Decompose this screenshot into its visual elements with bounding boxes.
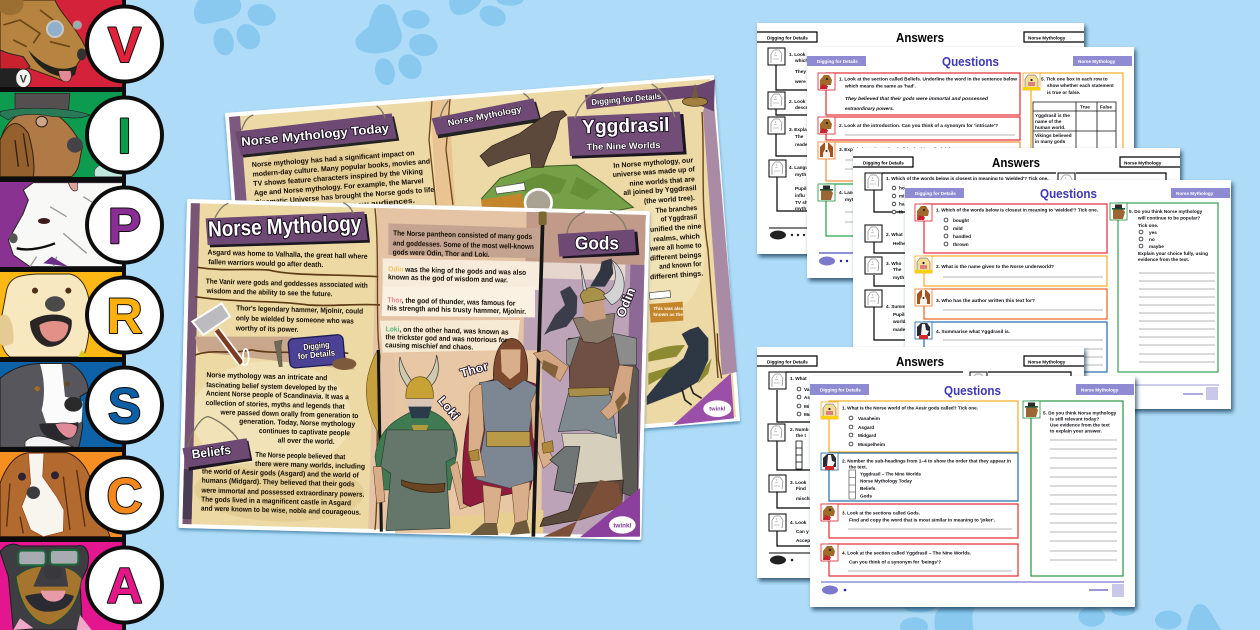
text block: left column: fallen warriors would go after death. xyxy=(208,257,323,269)
poster: front, Norse Mythology and Gods xyxy=(178,199,650,540)
question 2 box: the text. xyxy=(849,464,867,470)
heading: Norse Mythology Today: Norse Mythology Today xyxy=(241,121,390,149)
question 1 box: 1. Which of the words below is closest in meaning to 'wielded'? Tick one. xyxy=(936,208,1098,212)
answer boxes: 1. Look xyxy=(789,52,806,57)
circle P xyxy=(87,188,162,262)
text block: Yggdrasil: and known for xyxy=(659,260,702,271)
circle A xyxy=(87,548,162,622)
answer boxes: myth xyxy=(795,172,806,177)
text block: Yggdrasil: were all home to xyxy=(649,241,702,253)
heading: Norse Mythology Today xyxy=(235,106,399,158)
question 3 box: Find and copy the word that is most similar in meaning to 'joker'. xyxy=(849,518,995,522)
text block: left column: fascinating belief system developed by the xyxy=(206,380,337,392)
question 3 box: 3. Explain how the author builds the idea of Mjolnir. xyxy=(839,147,953,152)
text block: left column: The Norse people believed that xyxy=(255,450,346,461)
question 1 box xyxy=(821,401,1018,452)
icon: raven on spear xyxy=(544,286,577,335)
answer boxes: mi xyxy=(899,194,904,198)
question 1 box: They believed that their gods were immortal and possessed xyxy=(845,96,988,101)
question 5 box: Tick one. xyxy=(1138,223,1158,228)
heading: Norse Mythology: Norse Mythology xyxy=(208,210,362,242)
answer boxes xyxy=(865,173,1166,340)
band: blue S xyxy=(0,362,122,447)
heading: Yggdrasil The Nine Worlds: The Nine Worlds xyxy=(586,140,661,152)
question 5 box: is still relevant today? xyxy=(1050,416,1099,422)
question 4 box xyxy=(818,184,1020,236)
text block: left column: collection of stories, myths and legends that xyxy=(206,398,345,411)
answer boxes: Mi xyxy=(804,404,809,409)
answer boxes: Pupils xyxy=(795,186,809,191)
header: Digging for Details xyxy=(767,360,808,364)
answer boxes: the t xyxy=(796,433,806,438)
question 2 box: Norse Mythology Today xyxy=(860,478,912,484)
header: Digging for Details xyxy=(915,191,956,196)
black dividers xyxy=(0,0,126,630)
answer boxes: describ xyxy=(795,105,812,110)
header: Questions xyxy=(942,55,999,69)
text block: gods paragraphs: the trickster god and was notorious for xyxy=(385,332,508,344)
header: Answers xyxy=(992,156,1040,170)
answer boxes: ha xyxy=(899,202,905,206)
answer boxes: readers xyxy=(795,142,812,147)
icon: eagle xyxy=(480,111,567,167)
header: Digging for Details xyxy=(863,160,904,166)
question 5 box: 5. Do you think Norse mythology xyxy=(1043,410,1117,416)
text block: gods paragraphs: The Norse pantheon consisted of many gods xyxy=(393,228,532,241)
text block: Yggdrasil xyxy=(612,156,703,281)
header: Digging for Details xyxy=(820,388,861,392)
text block: Norse Mythology Today xyxy=(252,147,435,216)
question 4 box xyxy=(821,544,1018,576)
question 4 box: 4. Language xyxy=(839,190,867,195)
band: purple P xyxy=(0,182,123,267)
text block: Norse Mythology Today: TV shows feature characters inspired by the Viking xyxy=(253,167,423,188)
question 4 box: 4. Summarise what Yggdrasil is. xyxy=(936,329,1010,334)
answer boxes: 2. Look xyxy=(789,99,806,104)
question 2 box xyxy=(818,117,1020,140)
banner: Norse Mythology xyxy=(432,93,542,138)
text block: left column: Ancient Norse people of Scandinavia. It was a xyxy=(206,389,350,401)
question 1 box: Muspelheim xyxy=(858,442,885,447)
text block: left column: worthy of its power. xyxy=(235,323,299,334)
circle S xyxy=(87,368,162,442)
worksheet: answers 1 xyxy=(757,23,1084,254)
answer boxes: 1. What xyxy=(790,376,807,381)
heading: Yggdrasil The Nine Worlds xyxy=(567,84,687,159)
question 5 box: 5. Do you think Norse mythology xyxy=(1129,209,1203,214)
text block: Yggdrasil: nine worlds that are xyxy=(629,175,695,188)
heading: Gods: Gods xyxy=(575,232,619,253)
answer boxes: The xyxy=(795,134,804,139)
text block: left column: Norse mythology was an intricate and xyxy=(206,370,327,382)
text block: left column: The gods lived in a magnificent castle in Asgard xyxy=(201,494,351,507)
answer boxes: ho xyxy=(899,186,905,190)
question 1 box: bought xyxy=(953,218,969,223)
top banner: Digging for Details xyxy=(585,79,715,112)
small map labels xyxy=(481,183,553,217)
question 5 box with table: False xyxy=(1100,104,1112,110)
text block: gods paragraphs: his strength and his trusty hammer, Mjolnir. xyxy=(387,303,526,316)
answer boxes: myth xyxy=(795,206,806,211)
header: Norse Mythology xyxy=(1078,59,1116,64)
answer boxes: 3. Look xyxy=(790,480,807,485)
text block: left column xyxy=(200,248,371,517)
heading: Gods xyxy=(558,212,639,258)
icon: raven on helmet xyxy=(590,258,613,287)
text block: left column: and were known to be wise, noble and courageous. xyxy=(201,503,361,517)
band: orange C xyxy=(0,452,122,537)
header: Norse Mythology xyxy=(1028,36,1066,40)
text block: left column: generation. Today, Norse mythology xyxy=(239,416,355,428)
panel: gods illustration: Odin xyxy=(614,286,638,319)
question 1 box: extraordinary powers. xyxy=(845,106,894,111)
header: Norse Mythology xyxy=(1176,191,1214,196)
question 1 box: Vanaheim xyxy=(858,416,880,421)
question 5 box with table: human world. xyxy=(1035,125,1065,130)
question 2 box: 2. What is the name given to the Norse underworld? xyxy=(936,264,1054,269)
question 1 box: 1. What is the Norse world of the Aesir gods called? Tick one. xyxy=(842,406,978,410)
footer xyxy=(769,228,817,240)
tag: This was also xyxy=(653,306,684,311)
header: Norse Mythology xyxy=(1081,388,1119,392)
circle R xyxy=(87,278,162,352)
axe head xyxy=(550,447,580,493)
question 5 box: Use evidence from the text xyxy=(1050,422,1110,428)
question 1 box: Midgard xyxy=(858,433,876,438)
panel: lower right raven and twinkl corner xyxy=(647,291,734,425)
header: Answers xyxy=(896,355,944,369)
text block: Yggdrasil: In Norse mythology, our xyxy=(613,156,694,170)
header xyxy=(853,156,1180,170)
band: pink A xyxy=(0,542,122,630)
footer xyxy=(917,385,1219,400)
header xyxy=(807,55,1132,69)
text block: Norse Mythology Today: Norse mythology has had a significant impact on xyxy=(252,148,415,169)
worksheet: questions 1 xyxy=(807,47,1134,278)
answer boxes: Pupils xyxy=(893,312,907,317)
answer boxes: TV sh xyxy=(795,200,808,205)
figure: Loki xyxy=(373,355,467,531)
worksheet: answers 3 xyxy=(757,347,1084,578)
footer xyxy=(821,582,1124,597)
icon: cavalier spaniel dog xyxy=(0,453,110,537)
text block: Norse Mythology Today: and introduced them to new audiences. xyxy=(255,196,415,216)
question 5 box: Explain your choice fully, using xyxy=(1138,251,1208,256)
question 4 box: myth xyxy=(845,197,856,202)
text block: left column: there were many worlds, including xyxy=(255,459,365,471)
question 5 box: evidence from the text. xyxy=(1138,257,1189,262)
circle V: V xyxy=(108,17,142,73)
twinkl corner xyxy=(580,488,640,537)
question 2 box: Yggdrasil – The Nine Worlds xyxy=(860,472,921,476)
answer boxes: were xyxy=(794,79,806,84)
text block: Yggdrasil: (the world tree). xyxy=(644,194,695,206)
question 5 box: to explain your answer. xyxy=(1050,428,1102,434)
panel: left parchment details xyxy=(182,203,380,530)
text block: left column: were passed down orally from generation to xyxy=(219,407,359,420)
answer boxes xyxy=(768,372,1071,546)
answer boxes: 4. Summ xyxy=(886,304,906,309)
icon: Mjolnir hammer xyxy=(192,303,249,365)
text block: gods paragraphs: Loki, on the other hand, was known as xyxy=(386,324,509,336)
icon: bloodhound dog in hat xyxy=(0,93,123,177)
icon: terrier dog with round glasses: V xyxy=(20,74,28,86)
question 1 box xyxy=(818,73,1020,115)
heading: Norse Mythology xyxy=(206,203,370,247)
answer boxes: Helheim xyxy=(893,241,911,246)
text block: left column: continues to captivate people xyxy=(259,426,350,437)
circle C xyxy=(87,458,162,532)
question 5 box with table: show whether each statement xyxy=(1047,83,1114,88)
question 5 box with table: True xyxy=(1080,104,1090,110)
text block: Yggdrasil: all joined by Yggdrasil xyxy=(623,184,697,197)
labels: Loki xyxy=(435,394,462,422)
question 5 box with table: 5. Tick one box in each row to xyxy=(1041,76,1108,82)
answer boxes: Find xyxy=(796,486,806,491)
header xyxy=(810,384,1134,398)
tree canopy xyxy=(482,165,633,217)
question 5 box: maybe xyxy=(1149,244,1164,249)
answer boxes: mischie xyxy=(796,496,814,501)
text block: left column: were immortal and possessed extraordinary powers. xyxy=(200,485,364,499)
question 5 box with table: Vikings believed xyxy=(1035,133,1072,138)
header: Answers xyxy=(896,31,944,45)
text block: gods paragraphs xyxy=(385,228,534,353)
circle S: S xyxy=(108,378,141,434)
answer boxes: Va xyxy=(804,387,810,392)
text block: Yggdrasil: different beings xyxy=(650,251,702,263)
answer boxes: 4. Language xyxy=(789,165,817,170)
question 2 box: Beliefs xyxy=(860,486,876,491)
icon: gold axe xyxy=(366,350,381,532)
circle V xyxy=(87,6,162,82)
question 5 box: yes xyxy=(1149,230,1157,235)
answer boxes: As xyxy=(804,395,810,400)
answer boxes: 4. Look xyxy=(790,520,807,525)
tag: known as the xyxy=(653,312,683,317)
heading: Yggdrasil The Nine Worlds: Yggdrasil xyxy=(582,115,670,138)
text block: left column: The Vanir were gods and goddesses associated with xyxy=(206,277,368,290)
text block: gods paragraphs: and goddesses. Some of the most well-known xyxy=(393,238,534,251)
header: Questions xyxy=(944,384,1001,398)
answer boxes: 3. Explain xyxy=(789,127,811,132)
worksheet: questions 2 xyxy=(905,180,1231,409)
question 3 box: 3. Look at the sections called Gods. xyxy=(842,510,920,516)
answer boxes: myth xyxy=(893,275,904,280)
answer boxes: influ xyxy=(795,193,805,198)
text block: Norse Mythology Today: Age and Norse mythology. For example, the Marvel xyxy=(254,176,424,198)
answer boxes: They xyxy=(795,69,806,74)
circle R: R xyxy=(106,288,143,344)
text block: Norse Mythology Today: Cinematic Universe has brought the Norse gods to life xyxy=(254,185,434,207)
answer boxes xyxy=(768,48,817,211)
worksheet: questions 3 xyxy=(810,376,1135,607)
header: Questions xyxy=(1040,187,1097,201)
answer boxes: 2. What xyxy=(886,232,903,237)
band: red V xyxy=(0,0,122,88)
question 2 box: 2. Number the sub-headings from 1–4 to show the order that they appear in xyxy=(842,458,1011,464)
badge: Digging for Details: Digging xyxy=(303,339,330,352)
badge: Digging for Details xyxy=(288,334,356,370)
text block: Yggdrasil: of Yggdrasil xyxy=(660,213,697,224)
text block: left column: Thor's legendary hammer, Mjolnir, could xyxy=(236,303,363,316)
text block: gods paragraphs: Thor, the god of thunder, was famous for xyxy=(387,295,516,308)
text block: Norse Mythology Today: modern-day culture. Many popular books, movies and xyxy=(252,157,430,179)
question 1 box: Asgard xyxy=(858,425,874,430)
band: green I xyxy=(0,92,123,177)
text block: gods paragraphs: causing mischief and chaos. xyxy=(385,340,473,352)
header: Digging for Details xyxy=(817,59,858,64)
question 5 box: will continue to be popular? xyxy=(1137,216,1200,220)
olive branches xyxy=(648,345,712,385)
answer boxes: Accept xyxy=(796,538,812,543)
answer boxes: 3. Who xyxy=(886,261,901,266)
icon: raven xyxy=(647,327,708,405)
figure: Thor xyxy=(462,338,554,535)
text block: Yggdrasil: universe was made up of xyxy=(612,165,696,179)
answer boxes: Can y xyxy=(796,529,809,534)
heading: Beliefs: Beliefs xyxy=(191,443,232,462)
tag xyxy=(649,291,684,323)
question 4 box: Can you think of a synonym for 'beings'? xyxy=(849,560,941,564)
circle C: C xyxy=(106,468,143,524)
badge: Digging for Details: for Details xyxy=(297,347,336,361)
question 5 box with table: Yggdrasil is the xyxy=(1035,113,1070,118)
question 1 box: handled xyxy=(953,234,971,239)
text block: Yggdrasil: The branches xyxy=(655,204,697,215)
panel: gods illustration: Thor xyxy=(459,359,490,380)
question 5 box xyxy=(1110,203,1218,372)
torn band xyxy=(195,337,355,370)
icon: white fluffy dog xyxy=(8,183,123,267)
question 4 box xyxy=(915,322,1107,372)
header xyxy=(757,31,1084,45)
question 2 box: 2. Look at the introduction. Can you think of a synonym for 'intricate'? xyxy=(839,123,998,128)
spear xyxy=(533,212,543,537)
answer boxes: th xyxy=(899,210,904,214)
twinkl corner: twinkl xyxy=(613,522,632,529)
footer xyxy=(819,253,867,266)
question 4 box: 4. Look at the section called Yggdrasil – The Nine Worlds. xyxy=(842,550,971,556)
circle A: A xyxy=(106,558,143,614)
text block: left column: the world of Aesir gods (Asgard) and the world of xyxy=(202,466,360,480)
header xyxy=(905,187,1230,201)
text block: left column: Asgard was home to Valhalla, the great hall where xyxy=(208,248,368,261)
question 1 box: mild xyxy=(953,226,963,231)
circle I: I xyxy=(118,108,131,164)
heading: Beliefs xyxy=(182,417,252,471)
text block: gods paragraphs: known as the god of wisdom and war. xyxy=(388,272,508,284)
question 1 box: thrown xyxy=(953,242,969,247)
answer boxes: world xyxy=(892,319,906,324)
panel: Yggdrasil illustration and headings xyxy=(432,79,715,281)
circle P: P xyxy=(108,198,141,254)
question 5 box: no xyxy=(1149,237,1155,242)
text block: Yggdrasil: unified the nine xyxy=(650,222,702,234)
worksheet: answers 2 xyxy=(853,148,1180,379)
text block: gods paragraphs: gods were Odin, Thor and Loki. xyxy=(393,247,490,259)
figure: Odin xyxy=(533,258,638,537)
header: Norse Mythology xyxy=(1028,360,1066,364)
text block: gods paragraphs: Odin was the king of the gods and was also xyxy=(388,264,527,277)
icon: nail xyxy=(274,340,282,367)
panel: gods illustration xyxy=(366,212,640,537)
text block: Yggdrasil: realms, which xyxy=(653,232,700,244)
header xyxy=(757,355,1084,369)
band: yellow R xyxy=(0,272,122,357)
question 5 box xyxy=(1023,401,1123,576)
question 3 box xyxy=(915,289,1107,319)
question 5 box with table: in many gods xyxy=(1035,139,1066,144)
question 1 box xyxy=(915,204,1107,253)
question 5 box with table xyxy=(1023,73,1123,253)
question 1 box: 1. Look at the section called Beliefs. Underline the word in the sentence below xyxy=(839,76,1017,82)
banner: Norse Mythology: Norse Mythology xyxy=(447,104,523,128)
icon: border collie dog xyxy=(0,363,88,447)
circle I xyxy=(87,98,162,172)
question 3 box xyxy=(818,142,1020,181)
text block: left column: all over the world. xyxy=(278,435,335,446)
text block: Yggdrasil: different things. xyxy=(650,270,703,281)
answer boxes: Mu xyxy=(804,412,811,417)
VIPERS strip xyxy=(0,0,162,630)
answer boxes: The xyxy=(893,267,902,272)
text block: left column: only be wielded by someone who was xyxy=(236,313,354,325)
header: Norse Mythology xyxy=(1124,160,1162,166)
answer boxes: which xyxy=(794,58,808,63)
text block: left column: humans (Midgard). They believed that their gods xyxy=(202,475,355,488)
icon: rottweiler dog with green glasses xyxy=(0,544,92,630)
question 2 box xyxy=(821,453,1018,501)
text block: left column: wisdom and the ability to see the future. xyxy=(206,286,333,298)
answer boxes: 1. Which of the words below is closest in meaning to 'wielded'? Tick one. xyxy=(886,176,1049,181)
question 3 box: 3. Who has the author written this text for? xyxy=(936,298,1035,303)
answer boxes: made xyxy=(893,327,906,332)
twinkl corner: twinkl xyxy=(709,407,726,413)
answer boxes: 2. Numb xyxy=(790,427,809,432)
question 2 box: Gods xyxy=(860,494,872,498)
text boxes background xyxy=(380,223,543,533)
header: Digging for Details xyxy=(767,36,808,40)
poster: back, Norse Mythology Today and Yggdrasil xyxy=(225,75,740,459)
question 3 box xyxy=(821,504,1018,538)
top banner: Digging for Details: Digging for Details xyxy=(591,91,662,107)
footer xyxy=(769,553,817,564)
question 5 box with table: name of the xyxy=(1035,119,1062,124)
icon: golden retriever dog xyxy=(0,274,90,357)
question 5 box with table: is true or false. xyxy=(1047,90,1080,95)
question 2 box xyxy=(915,256,1107,286)
question 1 box: which means the same as 'had'. xyxy=(844,84,916,88)
